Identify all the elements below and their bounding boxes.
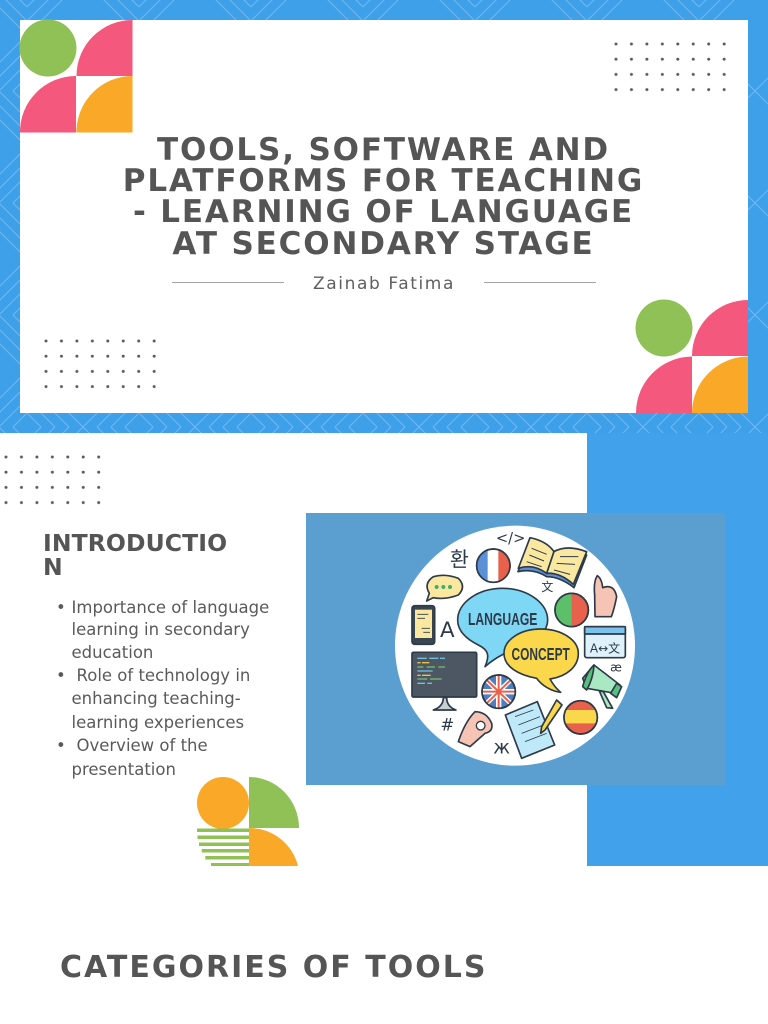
icon: green and red flag <box>555 593 588 627</box>
icon: uk flag <box>482 675 515 708</box>
title <box>123 132 644 262</box>
bullet list: Role of technology in <box>76 666 250 685</box>
bullet list: • <box>56 736 66 755</box>
icon: document and pencil <box>505 700 562 758</box>
title: TOOLS, SOFTWARE AND <box>157 132 610 168</box>
bullet list: education <box>72 643 153 662</box>
illustration labels: 환 <box>450 543 469 573</box>
bullet list <box>56 598 269 779</box>
title: PLATFORMS FOR TEACHING <box>123 163 644 199</box>
icon: open book <box>518 538 587 588</box>
slide 2: introduction <box>0 433 768 866</box>
illustration labels: ж <box>493 738 510 759</box>
bullet list: • <box>56 598 66 617</box>
patterned blue frame <box>0 0 768 433</box>
slide 3: categories heading: CATEGORIES OF TOOLS <box>60 950 487 985</box>
slide 1: title slide <box>0 0 768 433</box>
title: - LEARNING OF LANGUAGE <box>133 194 634 230</box>
icon: chat bubble <box>427 575 462 601</box>
illustration labels: A↔文 <box>590 640 620 655</box>
white title panel <box>20 20 748 413</box>
title: AT SECONDARY STAGE <box>172 226 595 262</box>
icon: language speech bubble <box>458 588 548 667</box>
bullet list: Importance of language <box>72 598 269 617</box>
illustration labels: æ <box>610 661 622 675</box>
introduction heading: N <box>43 553 63 581</box>
icon: ok hand <box>458 712 492 747</box>
illustration labels: 文 <box>541 579 553 594</box>
illustration labels <box>440 530 622 759</box>
bullet list: presentation <box>72 760 176 779</box>
top-left dot grid <box>0 449 104 510</box>
bullet list: Overview of the <box>76 736 208 755</box>
illustration labels: LANGUAGE <box>468 609 537 629</box>
top-left geometric decoration <box>20 20 132 132</box>
illustration labels: A <box>440 618 455 643</box>
icon: concept speech bubble <box>504 629 578 692</box>
icon: raised hand <box>594 576 617 617</box>
icon: french flag <box>477 549 510 582</box>
illustration labels: </> <box>496 530 525 547</box>
bullet list: learning experiences <box>72 713 244 732</box>
introduction heading: INTRODUCTIO <box>43 529 227 557</box>
illustration labels: CONCEPT <box>511 644 570 664</box>
bottom-right geometric decoration <box>636 300 748 413</box>
icon: spanish flag <box>564 701 598 734</box>
icon: megaphone <box>583 665 622 708</box>
icon: translation window <box>585 627 625 658</box>
illustration labels: # <box>440 715 454 734</box>
introduction heading <box>43 529 227 581</box>
white circle <box>395 526 635 766</box>
language concept illustration <box>395 526 635 766</box>
orange and green geometric decoration <box>197 777 299 866</box>
bullet list: • <box>56 666 66 685</box>
blue side panel <box>587 433 768 866</box>
bullet list: enhancing teaching- <box>72 689 241 708</box>
author line: Zainab Fatima <box>313 274 455 294</box>
icon: code monitor <box>412 652 477 710</box>
top-right dot grid <box>608 36 732 98</box>
bottom-left dot grid <box>38 333 162 395</box>
language concept picture panel <box>306 513 725 785</box>
bullet list: learning in secondary <box>72 620 250 639</box>
icon: phone <box>412 606 435 644</box>
